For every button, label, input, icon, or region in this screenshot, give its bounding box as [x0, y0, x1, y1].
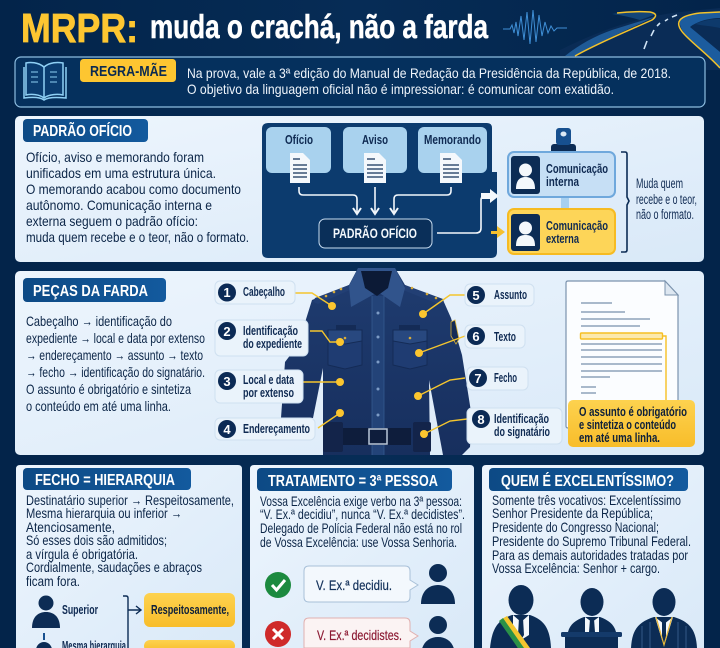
- box: padrão ofício: [319, 219, 432, 248]
- note: muda quem recebe: [636, 176, 697, 222]
- box: respeitosamente: [144, 593, 235, 627]
- label 8: identificação do signatário: [467, 408, 562, 444]
- panel: peças da farda: [15, 268, 704, 455]
- label 3: local e data: Local e data: [243, 373, 295, 387]
- label 4: endereçamento: [215, 418, 315, 440]
- heading: padrão ofício: PADRÃO OFÍCIO: [33, 120, 132, 140]
- rule text: O objetivo da linguagem oficial não é impressionar: é comunicar com exatidão.: [187, 81, 614, 97]
- arrow: to comunicação externa: [491, 226, 505, 238]
- callout: assunto obrigatório: e sintetiza o conteúdo: [579, 418, 676, 432]
- text block: tratamento: Vossa Excelência exige verbo na 3ª pessoa:: [260, 493, 462, 509]
- text block: padrão ofício: Ofício, aviso e memorando foram: [26, 149, 204, 165]
- text block: fecho: Mesma hierarquia ou inferior →: [26, 505, 182, 521]
- text block: peças da farda: → fecho → identificação do signatário.: [26, 364, 205, 380]
- text block: peças da farda: O assunto é obrigatório e sintetiza: [26, 381, 191, 397]
- label 6: texto: [465, 325, 525, 348]
- text block: excelentíssimo: Senhor Presidente da República;: [492, 505, 653, 521]
- text block: tratamento: Delegado de Polícia Federal não está no rol: [260, 520, 462, 536]
- callout: assunto obrigatório: O assunto é obrigatório: [579, 405, 687, 419]
- arrows into padrão ofício: [299, 187, 451, 214]
- text block: peças da farda: Cabeçalho → identificação do: [26, 313, 172, 329]
- label 8: identificação do signatário: do signatário: [494, 425, 550, 439]
- text block: padrão ofício: autônomo. Comunicação interna e: [26, 197, 212, 213]
- panel: fecho = hierarquia: [16, 465, 242, 648]
- diagram: documents into padrão ofício: [262, 123, 505, 258]
- bracket and arrow: [123, 596, 141, 648]
- card: ofício: [266, 127, 331, 183]
- panel: quem é excelentíssimo: [482, 465, 704, 648]
- label 2: identificação do expediente: [215, 320, 308, 356]
- card: aviso: Aviso: [362, 133, 388, 147]
- figure: presidente do stf: [631, 588, 697, 648]
- text block: fecho: ficam fora.: [26, 573, 80, 589]
- text block: fecho: Cordialmente, saudações e abraços: [26, 559, 202, 575]
- text block: fecho: a vírgula é obrigatória.: [26, 546, 138, 562]
- text block: excelentíssimo: [492, 492, 691, 576]
- label 5: assunto: 5: [472, 288, 480, 303]
- text block: fecho: Destinatário superior → Respeitosamente,: [26, 492, 234, 508]
- heading: tratamento: [257, 468, 452, 491]
- label 3: local e data: 3: [223, 374, 231, 389]
- label 4: endereçamento: Endereçamento: [243, 422, 310, 436]
- icon: person superior: [32, 596, 60, 628]
- road illustration: [560, 8, 720, 70]
- label 5: assunto: [465, 284, 534, 306]
- icon: badge clip: [551, 128, 576, 157]
- speech bubble: correct: V. Ex.ª decidiu.: [316, 577, 392, 593]
- document illustration: [566, 281, 678, 428]
- belt: [343, 428, 411, 445]
- bracket: [621, 152, 629, 252]
- title: [21, 5, 489, 51]
- label dots: [328, 302, 428, 438]
- text block: fecho: [26, 492, 234, 589]
- icon: person same level: [36, 642, 52, 648]
- text block: excelentíssimo: Presidente do Congresso Nacional;: [492, 519, 659, 535]
- heading: fecho: [23, 468, 191, 490]
- text block: excelentíssimo: Vossa Excelência: Senhor + cargo.: [492, 560, 660, 576]
- label 4: endereçamento: 4: [223, 422, 231, 437]
- label 1: cabeçalho: Cabeçalho: [243, 285, 285, 299]
- icon: cross: [265, 621, 291, 647]
- text block: padrão ofício: [26, 149, 249, 245]
- card: comunicação interna: interna: [546, 175, 580, 189]
- label 3: local e data: por extenso: [243, 386, 294, 400]
- text block: fecho: Só esses dois são admitidos;: [26, 532, 167, 548]
- heading: quem é excelentíssimo: QUEM É EXCELENTÍSSIMO?: [501, 471, 674, 490]
- rule text: [187, 65, 671, 97]
- callout: assunto obrigatório: em até uma linha.: [579, 431, 660, 445]
- icon: check: [265, 572, 291, 598]
- label 5: assunto: Assunto: [494, 288, 527, 302]
- text block: fecho: Atenciosamente,: [26, 519, 115, 535]
- label 1: cabeçalho: 1: [223, 285, 231, 300]
- badge: regra-mãe: [80, 59, 176, 82]
- panel: regra-mãe: [15, 57, 705, 107]
- label 7: fecho: 7: [474, 371, 482, 386]
- label 7: fecho: Fecho: [494, 371, 517, 385]
- title: muda o crachá, não a farda: [150, 8, 489, 45]
- pockets: [328, 330, 427, 369]
- text block: peças da farda: [26, 313, 205, 414]
- label: superior: Superior: [62, 603, 98, 617]
- arrow: to comunicação interna: [437, 189, 499, 233]
- label 2: identificação do expediente: 2: [223, 324, 231, 339]
- text block: peças da farda: → endereçamento → assunto → texto: [26, 347, 203, 363]
- collar: [349, 268, 405, 307]
- text block: tratamento: “V. Ex.ª decidiu”, nunca “V. Ex.ª decidistes”.: [260, 506, 465, 522]
- note: muda quem recebe: Muda quem: [636, 176, 683, 191]
- label 8: identificação do signatário: 8: [477, 412, 485, 427]
- text block: peças da farda: expediente → local e data por extenso: [26, 330, 205, 346]
- text block: tratamento: de Vossa Excelência: use Vossa Senhoria.: [260, 534, 457, 550]
- card: comunicação externa: Comunicação: [546, 219, 608, 233]
- heading: peças da farda: [23, 278, 166, 302]
- label 1: cabeçalho: [215, 281, 295, 304]
- connector: [43, 633, 45, 640]
- figure: presidente da república: [490, 585, 551, 648]
- heading: tratamento: TRATAMENTO = 3ª PESSOA: [268, 473, 438, 490]
- text block: padrão ofício: unificados em uma estrutura única.: [26, 165, 216, 181]
- label 7: fecho: [467, 367, 528, 390]
- card: comunicação interna: [508, 152, 615, 197]
- badge: regra-mãe: REGRA-MÃE: [90, 62, 167, 80]
- label 8: identificação do signatário: Identificação: [494, 412, 549, 426]
- callout: assunto obrigatório: [568, 400, 695, 447]
- title: MRPR:: [21, 5, 138, 51]
- box: padrão ofício: PADRÃO OFÍCIO: [333, 224, 417, 241]
- card: memorando: [418, 127, 487, 183]
- connector between badges: [561, 197, 569, 210]
- label 6: texto: Texto: [494, 330, 516, 344]
- card: ofício: Ofício: [285, 133, 313, 147]
- text block: peças da farda: o conteúdo em até uma linha.: [26, 398, 171, 414]
- text block: padrão ofício: muda quem recebe e o teor, não o formato.: [26, 229, 249, 245]
- card: comunicação externa: externa: [546, 232, 580, 246]
- box: atenciosamente: [144, 640, 235, 648]
- icon: open book: [24, 62, 66, 100]
- speech bubble: wrong: [304, 618, 418, 648]
- panel: padrão ofício: [15, 116, 704, 262]
- icon: sound wave: [503, 10, 567, 44]
- heading: quem é excelentíssimo: [489, 468, 688, 491]
- leader lines: [295, 293, 467, 434]
- label 2: identificação do expediente: Identificação: [243, 324, 298, 338]
- card: comunicação externa: [508, 209, 615, 254]
- box: respeitosamente: Respeitosamente,: [151, 603, 229, 617]
- text block: tratamento: [260, 493, 465, 550]
- speech bubble: wrong: V. Ex.ª decidistes.: [317, 627, 402, 643]
- label 2: identificação do expediente: do expediente: [243, 337, 302, 351]
- text block: padrão ofício: externa seguem o padrão ofício:: [26, 213, 198, 229]
- icon: person: [421, 564, 455, 604]
- panel: tratamento: [250, 465, 474, 648]
- heading: padrão ofício: [23, 119, 148, 142]
- text block: padrão ofício: O memorando acabou como documento: [26, 181, 241, 197]
- label 3: local e data: [215, 370, 303, 403]
- label 6: texto: 6: [472, 329, 480, 344]
- illustration: uniform shirt: [281, 268, 472, 455]
- icon: person: [421, 616, 455, 648]
- heading: peças da farda: PEÇAS DA FARDA: [33, 283, 148, 300]
- card: memorando: Memorando: [424, 133, 481, 147]
- highlight: assunto line: [580, 333, 666, 402]
- speech bubble: correct: [304, 566, 418, 602]
- heading: fecho: FECHO = HIERARQUIA: [35, 472, 175, 489]
- card: comunicação interna: Comunicação: [546, 162, 608, 176]
- card: aviso: [343, 127, 407, 183]
- figure: presidente do congresso: [561, 588, 622, 648]
